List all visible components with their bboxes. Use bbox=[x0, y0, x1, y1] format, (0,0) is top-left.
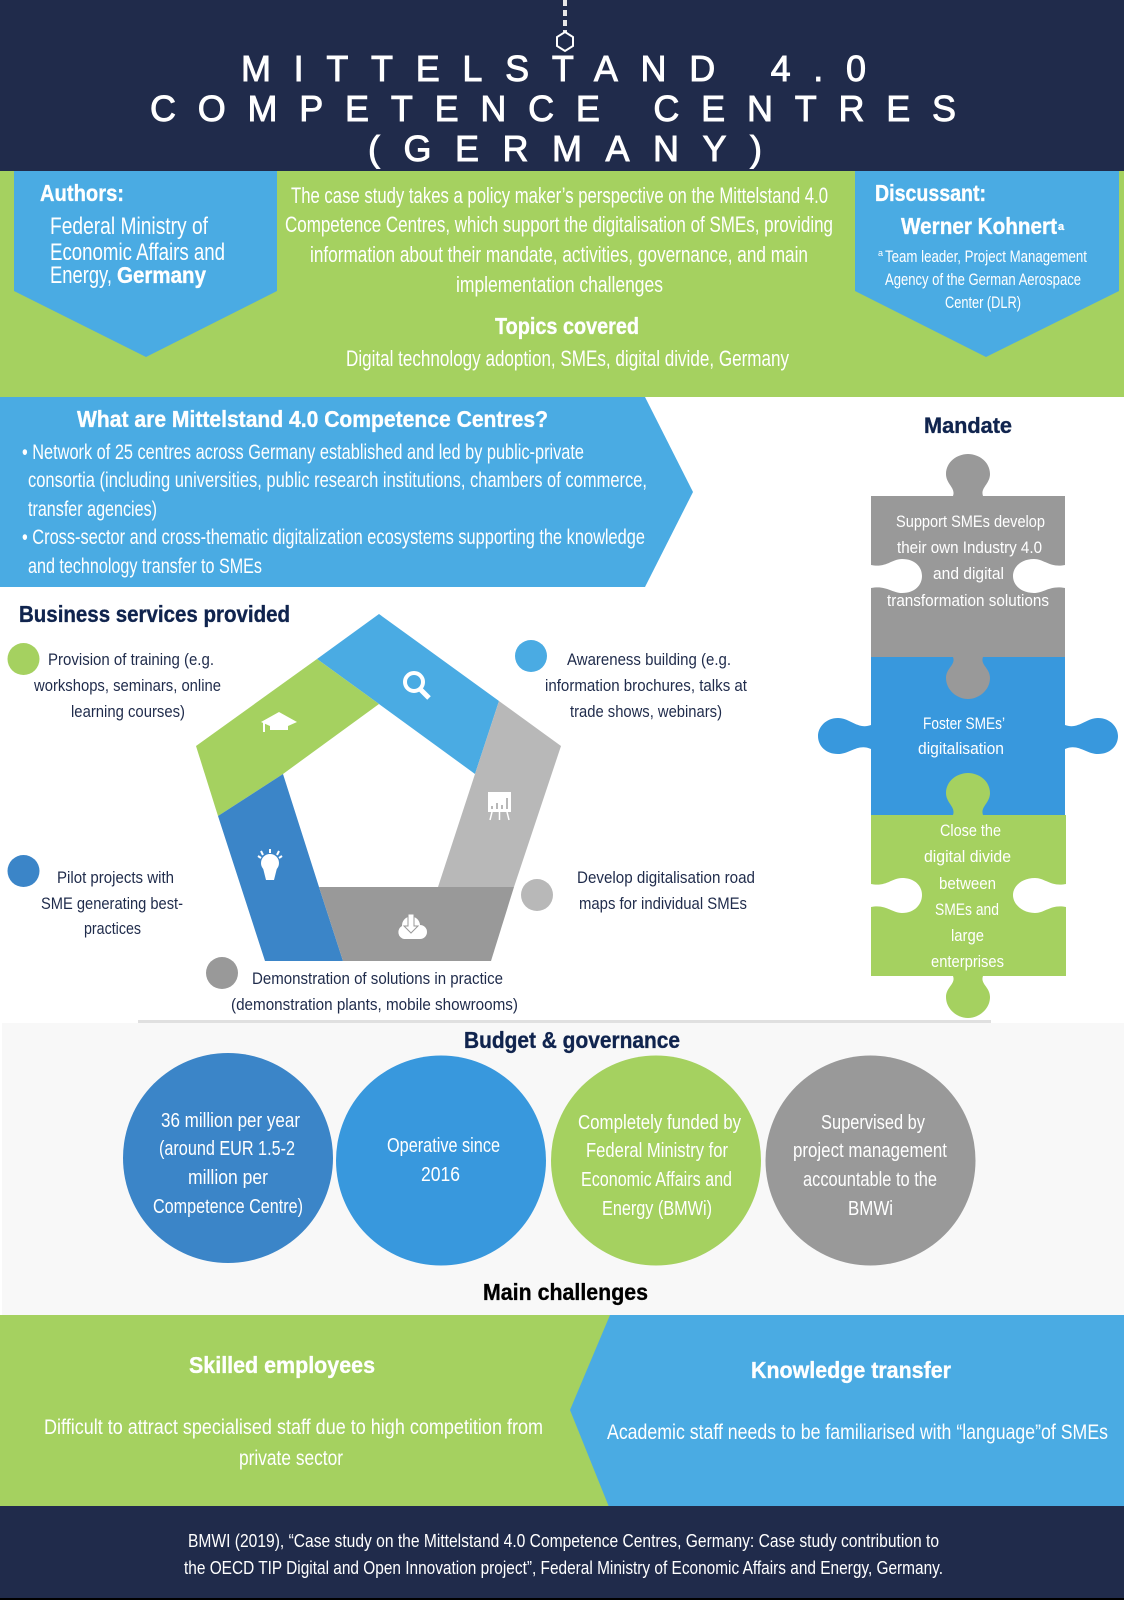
panel: skilled employees bbox=[0, 1315, 620, 1507]
panel: what are the centres: • Cross-sector and cross-thematic digitalization ecosystems supporting the knowledge bbox=[22, 526, 645, 549]
circle: supervision: project management bbox=[793, 1140, 947, 1162]
label: pilot projects: SME generating best- bbox=[41, 894, 183, 913]
text block: case study summary: implementation challenges bbox=[456, 272, 663, 297]
footer: citation bbox=[0, 1506, 1124, 1600]
circle: federal funding: Federal Ministry for bbox=[586, 1140, 728, 1162]
puzzle piece: support SMEs: transformation solutions bbox=[887, 591, 1049, 610]
circle: annual funding: million per bbox=[188, 1167, 268, 1189]
puzzle piece: support SMEs bbox=[871, 454, 1065, 699]
text block: case study summary: Competence Centres, which support the digitalisation of SMEs, providing bbox=[285, 212, 833, 237]
puzzle piece: close the divide: digital divide bbox=[924, 847, 1011, 866]
label: demonstration: Demonstration of solutions in practice bbox=[252, 969, 503, 988]
panel: skilled employees: private sector bbox=[239, 1447, 343, 1470]
segment: training bbox=[196, 659, 379, 816]
panel: authors bbox=[14, 171, 277, 357]
panel: discussant: Werner Kohnert bbox=[901, 213, 1057, 239]
panel: discussant bbox=[855, 171, 1119, 357]
heading: business services: Business services provided bbox=[19, 601, 290, 627]
label: demonstration bbox=[206, 957, 518, 1014]
circle: federal funding: Energy (BMWi) bbox=[602, 1198, 712, 1220]
puzzle piece: close the divide: SMEs and bbox=[935, 900, 999, 919]
panel: budget and governance bbox=[2, 1020, 1124, 1315]
label: training: workshops, seminars, online bbox=[33, 676, 221, 695]
panel: authors: Germany bbox=[117, 262, 206, 288]
label: road maps bbox=[521, 868, 755, 913]
circle: supervision: accountable to the bbox=[803, 1169, 937, 1191]
title bbox=[150, 48, 956, 169]
segment: pilot projects bbox=[218, 774, 343, 961]
circle: federal funding: Economic Affairs and bbox=[581, 1169, 732, 1191]
title: (GERMANY) bbox=[368, 128, 762, 169]
chart: services pentagon bbox=[196, 614, 561, 961]
circle: annual funding: (around EUR 1.5-2 bbox=[159, 1138, 295, 1160]
circle: annual funding: Competence Centre) bbox=[153, 1196, 303, 1218]
label: awareness: trade shows, webinars) bbox=[570, 702, 722, 721]
circle: operative since bbox=[336, 1056, 546, 1266]
puzzle piece: support SMEs: Support SMEs develop bbox=[896, 512, 1045, 531]
circle: operative since: 2016 bbox=[421, 1164, 460, 1186]
circle: supervision: Supervised by bbox=[821, 1112, 925, 1134]
footer: citation: the OECD TIP Digital and Open Innovation project”, Federal Ministry of Economic Affairs and Energy, Germany. bbox=[184, 1558, 943, 1578]
panel: authors: Authors: bbox=[40, 180, 124, 206]
label: pilot projects: practices bbox=[84, 919, 141, 938]
heading: main challenges: Main challenges bbox=[483, 1279, 648, 1305]
panel: discussant: Discussant: bbox=[875, 180, 986, 206]
heading: budget: Budget & governance bbox=[464, 1027, 680, 1053]
text block: topics covered: Digital technology adoption, SMEs, digital divide, Germany bbox=[346, 346, 789, 371]
label: pilot projects bbox=[8, 855, 183, 938]
panel: what are the centres: consortia (including universities, public research institutions, chambers of commerce, bbox=[28, 469, 647, 492]
text block: topics covered bbox=[346, 313, 789, 371]
panel: authors: Economic Affairs and bbox=[50, 239, 225, 266]
label: training: learning courses) bbox=[71, 702, 185, 721]
text block: topics covered: Topics covered bbox=[495, 313, 639, 339]
label: demonstration: (demonstration plants, mobile showrooms) bbox=[231, 995, 518, 1014]
label: training: Provision of training (e.g. bbox=[48, 650, 214, 669]
circle: annual funding bbox=[123, 1053, 333, 1263]
circle: federal funding bbox=[551, 1056, 761, 1266]
panel: knowledge transfer: Knowledge transfer bbox=[751, 1357, 951, 1383]
circle: supervision bbox=[766, 1056, 976, 1266]
text block: case study summary: information about their mandate, activities, governance, and main bbox=[310, 242, 808, 267]
panel: introduction band bbox=[0, 171, 1124, 397]
puzzle piece: foster digitalisation: Foster SMEs’ bbox=[923, 714, 1005, 733]
header band bbox=[0, 0, 1124, 171]
puzzle piece: close the divide: between bbox=[939, 874, 996, 893]
puzzle piece: close the divide: Close the bbox=[940, 821, 1001, 840]
panel: what are the centres: and technology transfer to SMEs bbox=[28, 555, 262, 578]
panel: what are the centres: • Network of 25 centres across Germany established and led by public-private bbox=[22, 441, 584, 464]
circle: federal funding: Completely funded by bbox=[578, 1112, 741, 1134]
label: road maps: Develop digitalisation road bbox=[577, 868, 755, 887]
label: training bbox=[8, 643, 221, 721]
puzzle piece: foster digitalisation bbox=[818, 657, 1118, 815]
panel: skilled employees: Skilled employees bbox=[189, 1352, 375, 1378]
circle: supervision: BMWi bbox=[848, 1198, 893, 1220]
footer: citation: BMWI (2019), “Case study on the Mittelstand 4.0 Competence Centres, Germany: Case study contribution to bbox=[188, 1531, 939, 1551]
label: awareness: information brochures, talks at bbox=[545, 676, 747, 695]
segment: demonstration bbox=[319, 887, 514, 961]
puzzle piece: close the divide: large bbox=[951, 926, 984, 945]
heading: mandate: Mandate bbox=[924, 413, 1012, 438]
label: awareness bbox=[515, 640, 747, 721]
panel: what are the centres bbox=[0, 397, 693, 587]
puzzle piece: support SMEs: and digital bbox=[933, 564, 1004, 583]
puzzle piece: close the divide bbox=[871, 773, 1066, 1018]
panel: authors: Energy, bbox=[50, 262, 112, 289]
panel: skilled employees: Difficult to attract specialised staff due to high competition from bbox=[44, 1416, 543, 1439]
puzzle piece: foster digitalisation: digitalisation bbox=[918, 739, 1004, 758]
puzzle piece: close the divide: enterprises bbox=[931, 952, 1004, 971]
circle: operative since: Operative since bbox=[387, 1135, 500, 1157]
chart: mandate puzzle bbox=[818, 454, 1118, 1018]
title: MITTELSTAND 4.0 bbox=[241, 48, 866, 89]
label: awareness: Awareness building (e.g. bbox=[567, 650, 731, 669]
text block: case study summary bbox=[285, 183, 833, 297]
panel: authors: Federal Ministry of bbox=[50, 213, 208, 240]
label: road maps: maps for individual SMEs bbox=[579, 894, 747, 913]
panel: discussant: a bbox=[878, 248, 883, 258]
panel: what are the centres: transfer agencies) bbox=[28, 498, 157, 521]
icon: dotted line with hexagon bbox=[557, 0, 573, 51]
segment: road maps bbox=[438, 701, 561, 887]
puzzle piece: support SMEs: their own Industry 4.0 bbox=[897, 538, 1042, 557]
panel: knowledge transfer bbox=[570, 1315, 1124, 1507]
panel: what are the centres: What are Mittelstand 4.0 Competence Centres? bbox=[77, 406, 548, 432]
text block: case study summary: The case study takes a policy maker’s perspective on the Mittelstand 4.0 bbox=[291, 183, 828, 208]
title: COMPETENCE CENTRES bbox=[150, 88, 956, 129]
label: pilot projects: Pilot projects with bbox=[57, 868, 174, 887]
panel: discussant: Center (DLR) bbox=[945, 293, 1021, 312]
panel: discussant: a bbox=[1058, 221, 1065, 233]
segment: awareness bbox=[317, 614, 499, 774]
circle: annual funding: 36 million per year bbox=[161, 1110, 300, 1132]
